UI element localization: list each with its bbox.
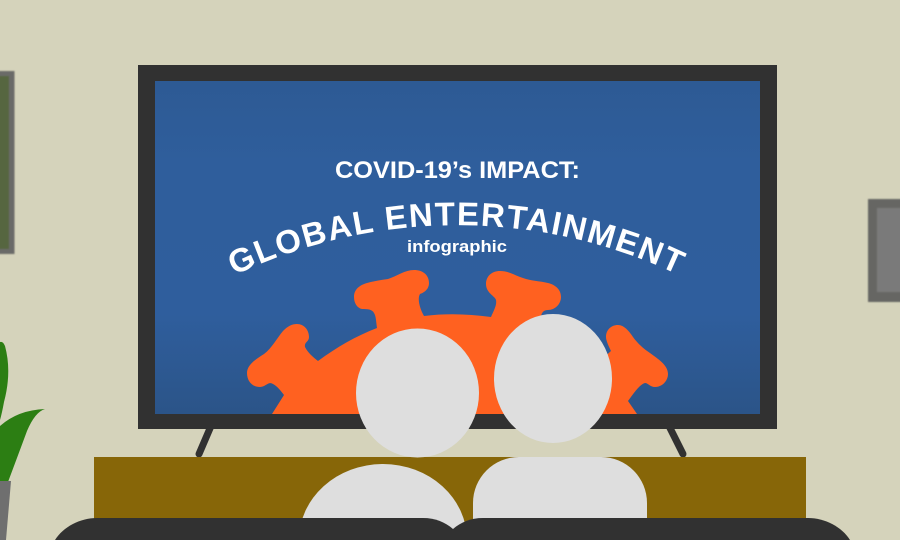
right person body — [473, 457, 647, 540]
couch — [55, 518, 850, 540]
picture frame: right wall — [867, 198, 900, 303]
plant leaves — [0, 342, 45, 482]
plant pot — [0, 481, 11, 540]
couch right cushion — [453, 518, 850, 540]
heading: COVID-19’s IMPACT: — [335, 157, 580, 184]
left person body — [299, 464, 467, 540]
right person head — [494, 314, 612, 443]
person: right — [473, 314, 647, 540]
television — [138, 65, 777, 429]
tv stand legs — [199, 426, 683, 454]
curved title: GLOBAL ENTERTAINMENT — [230, 202, 687, 272]
person: left — [299, 328, 479, 540]
media console — [94, 457, 806, 540]
picture frame: left wall — [0, 70, 16, 255]
icon: coronavirus — [247, 270, 668, 414]
couch left cushion — [55, 518, 453, 540]
tv frame — [138, 65, 777, 429]
tv screen — [155, 81, 760, 414]
subheading: infographic — [407, 237, 507, 256]
plant — [0, 342, 45, 540]
left person head — [356, 328, 479, 458]
